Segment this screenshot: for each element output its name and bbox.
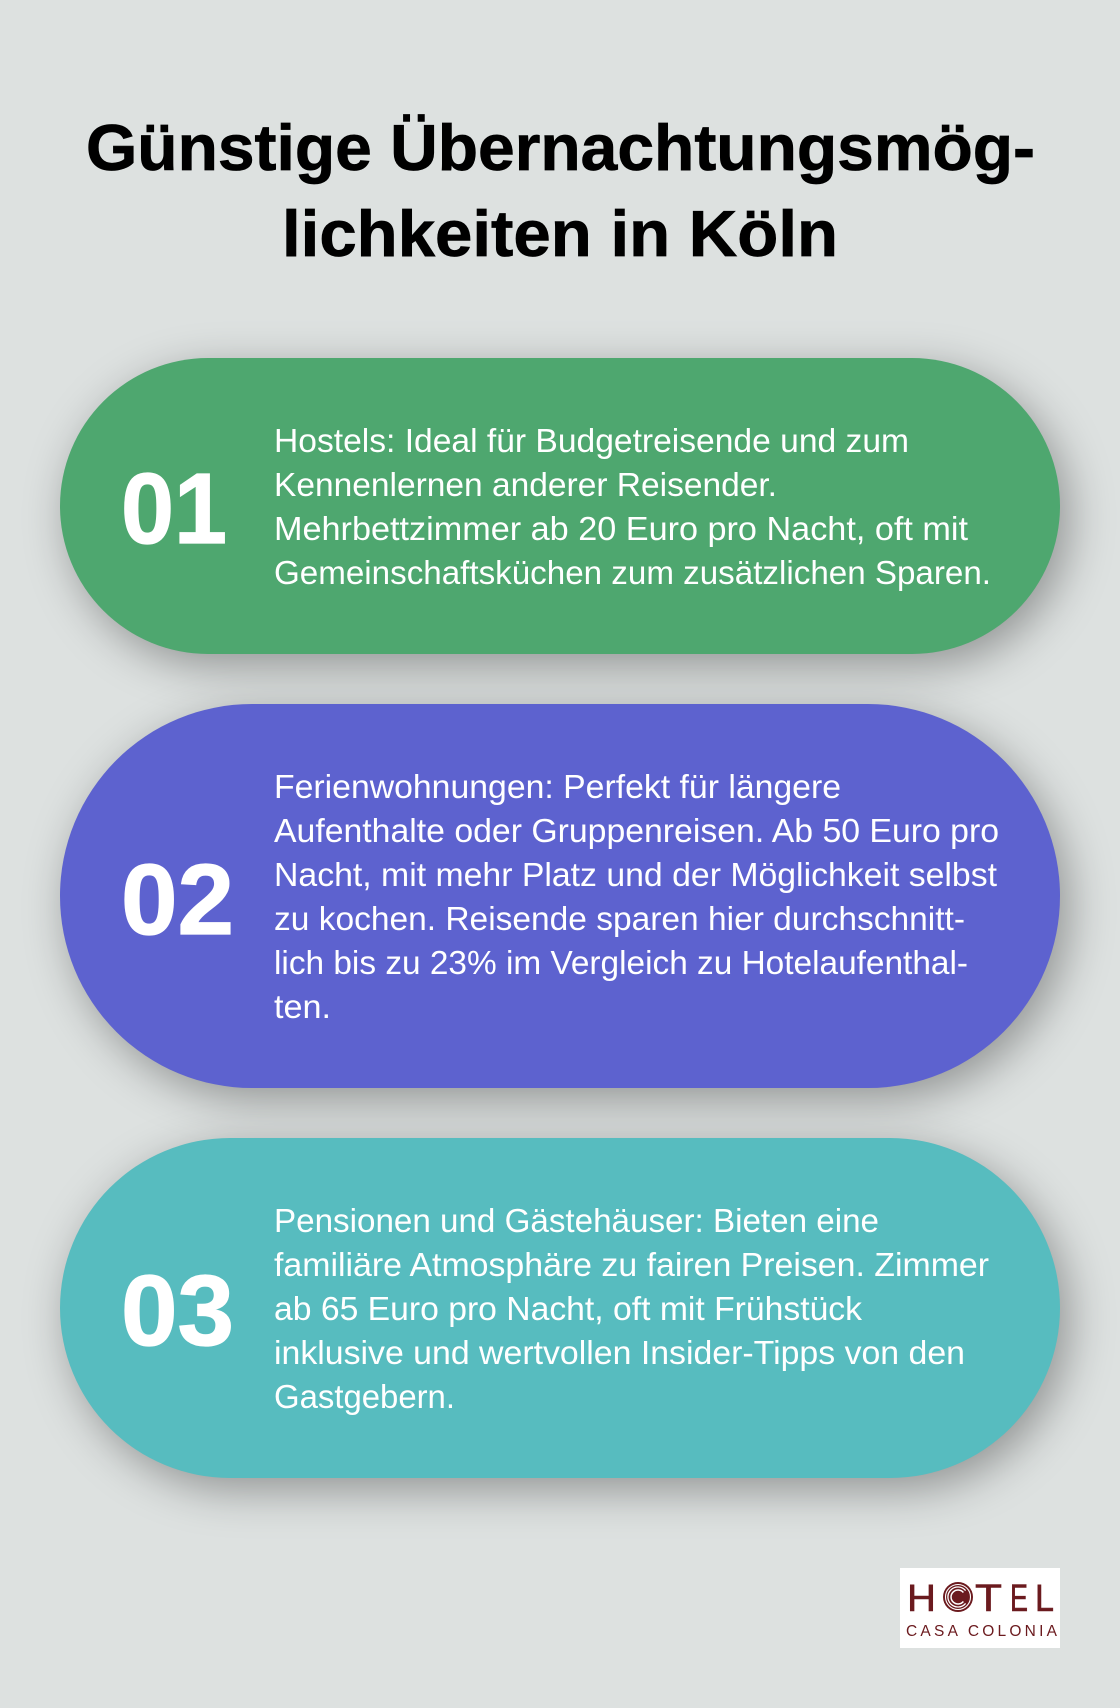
logo: CASA COLONIA (906, 1623, 1058, 1640)
text: pensionen: Gastgebern. (274, 1378, 455, 1415)
title: Günstige Übernachtungsmög- (86, 111, 1035, 184)
text: ferienwohnungen: zu kochen. Reisende sparen hier durchschnitt- (274, 900, 965, 937)
number 02: 02 (121, 844, 234, 956)
text: ferienwohnungen (274, 768, 999, 1025)
text: ferienwohnungen: ten. (274, 988, 331, 1025)
logo: L (1035, 1578, 1054, 1620)
text: hostels: Gemeinschaftsküchen zum zusätzlichen Sparen. (274, 554, 991, 591)
text: hostels: Mehrbettzimmer ab 20 Euro pro Nacht, oft mit (274, 510, 968, 547)
text: pensionen: familiäre Atmosphäre zu fairen Preisen. Zimmer (274, 1246, 989, 1283)
panel: hostels (60, 358, 1060, 654)
logo: H (907, 1578, 936, 1620)
logo (900, 1568, 1060, 1648)
text: pensionen: ab 65 Euro pro Nacht, oft mit Frühstück (274, 1290, 863, 1327)
text: ferienwohnungen: Ferienwohnungen: Perfekt für längere (274, 768, 841, 805)
text: pensionen: inklusive und wertvollen Insider-Tipps von den (274, 1334, 965, 1371)
text: hostels (274, 422, 991, 591)
title: lichkeiten in Köln (282, 197, 838, 270)
text: hostels: Kennenlernen anderer Reisender. (274, 466, 777, 503)
number 01: 01 (121, 453, 227, 565)
text: pensionen: Pensionen und Gästehäuser: Bieten eine (274, 1202, 879, 1239)
panel: pensionen (60, 1138, 1060, 1478)
text: ferienwohnungen: lich bis zu 23% im Vergleich zu Hotelaufenthal- (274, 944, 968, 981)
text: pensionen (274, 1202, 989, 1415)
text: ferienwohnungen: Aufenthalte oder Gruppenreisen. Ab 50 Euro pro (274, 812, 999, 849)
number 03: 03 (121, 1255, 234, 1367)
logo: T (975, 1578, 1002, 1620)
text: hostels: Hostels: Ideal für Budgetreisende und zum (274, 422, 909, 459)
text: ferienwohnungen: Nacht, mit mehr Platz und der Möglichkeit selbst (274, 856, 997, 893)
panel: ferienwohnungen (60, 704, 1060, 1088)
logo: E (1010, 1578, 1028, 1620)
title (86, 111, 1035, 270)
